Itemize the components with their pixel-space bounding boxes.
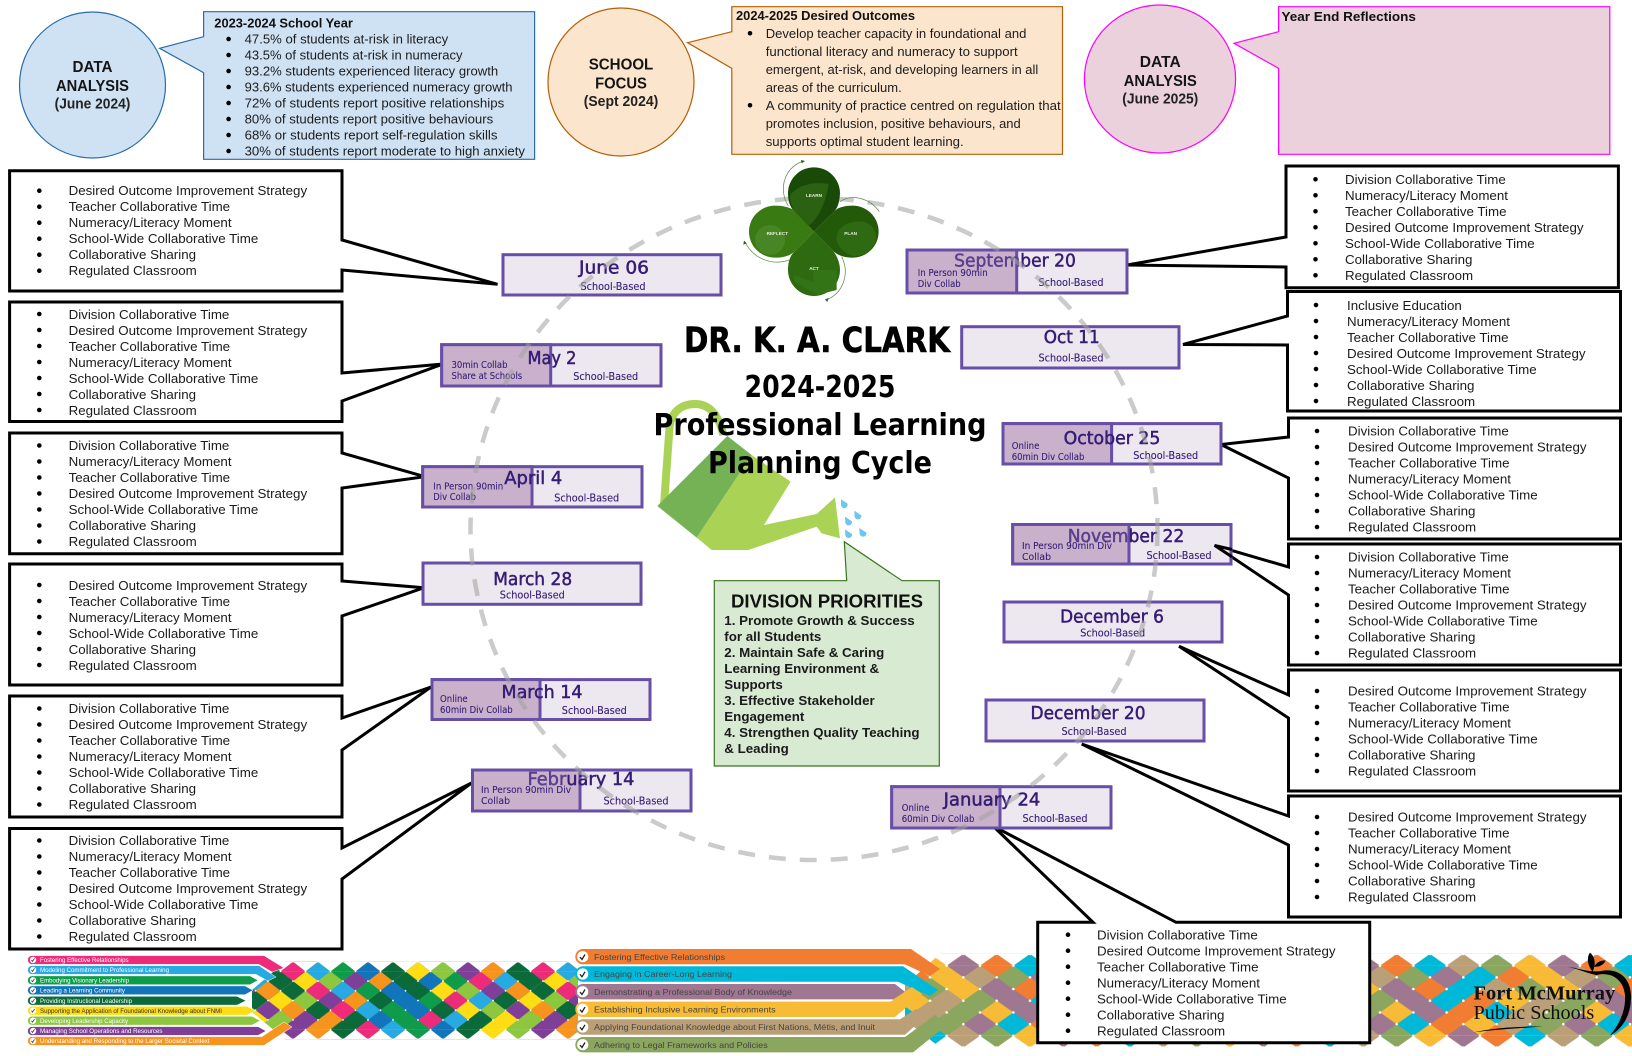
list box: December 6: Desired Outcome Improvement Strategy [1348,684,1587,699]
title: 2024-2025 [744,370,896,405]
list box: December 6: Numeracy/Literacy Moment [1348,716,1511,731]
date box: Oct 11 [962,327,1179,368]
logo: Fort McMurray Public Schools: Fort McMurray [1474,982,1615,1004]
list box: January 24 [993,826,1370,1043]
list box: March 14: Numeracy/Literacy Moment [69,749,232,764]
panel: data analysis June 2025 circle: DATA [1140,54,1181,71]
left leadership weave ribbon: Providing Instructional Leadership [40,998,133,1005]
date box: February 14: Collab [481,796,510,807]
date box: November 22 [1013,524,1231,564]
panel: 2023-2024 school year data callout [160,12,535,159]
left leadership weave ribbon: Understanding and Responding to the Larger Societal Context [40,1038,210,1045]
list box: October 25: Regulated Classroom [1348,520,1476,534]
left leadership weave ribbon: Managing School Operations and Resources [40,1028,162,1035]
list box: Oct 11: Collaborative Sharing [1347,378,1474,393]
list box: March 14: Regulated Classroom [69,797,197,812]
date box: March 28 [423,563,641,604]
list box: April 4: Division Collaborative Time [69,438,229,453]
list box: November 22: Regulated Classroom [1348,646,1476,660]
right teaching weave ribbon: Adhering to Legal Frameworks and Policies [594,1040,768,1050]
callout: division priorities: & Leading [724,741,789,756]
list box: February 14: Collaborative Sharing [69,913,196,928]
list box: November 22: Numeracy/Literacy Moment [1348,566,1511,580]
list box: May 2: Collaborative Sharing [69,387,196,402]
logo: Fort McMurray Public Schools [1473,953,1631,1036]
list box: January 24: Numeracy/Literacy Moment [1097,976,1260,990]
date box: October 25: 60min Div Collab [1012,452,1084,463]
list box: Oct 11: Numeracy/Literacy Moment [1347,314,1510,329]
panel: school focus circle: SCHOOL [589,56,654,74]
list box: April 4: Regulated Classroom [69,534,197,549]
list box: November 22 [1215,544,1620,665]
date box: November 22: In Person 90min Div [1022,541,1112,552]
date box: June 06: June 06 [578,258,649,278]
list box: April 4: Collaborative Sharing [69,518,196,533]
list box: December 6: Teacher Collaborative Time [1348,700,1510,715]
callout: division priorities: Learning Environment & [724,661,879,676]
callout: division priorities: Supports [724,677,783,692]
list box: March 14 [10,687,431,817]
list box: February 14: Numeracy/Literacy Moment [69,849,232,864]
list box: March 14: Division Collaborative Time [69,701,229,716]
list box: June 06: Numeracy/Literacy Moment [69,215,232,230]
arrow: November 22 callout tip over date box [1215,545,1232,557]
list box: December 20 [1082,744,1620,917]
date box: March 28: School-Based [500,589,565,601]
list box: June 06: School-Wide Collaborative Time [69,231,258,246]
date box: October 25: School-Based [1133,450,1198,462]
list box: Oct 11: School-Wide Collaborative Time [1347,362,1537,377]
list box: June 06: Collaborative Sharing [69,247,196,262]
icon: learn plan act reflect clover: PLAN [844,231,858,236]
date box: March 14: March 14 [502,683,582,703]
list box: May 2: Division Collaborative Time [69,307,229,322]
list box: January 24: Collaborative Sharing [1097,1008,1224,1022]
list box: September 20: Desired Outcome Improvement Strategy [1345,220,1584,235]
panel: 2024-2025 desired outcomes callout: functional literacy and numeracy to support [766,44,1018,59]
list box: September 20: Collaborative Sharing [1345,252,1472,267]
list box: March 28: Desired Outcome Improvement Strategy [69,578,307,593]
list box: March 14: School-Wide Collaborative Time [69,765,258,780]
list box: October 25: School-Wide Collaborative Time [1348,488,1538,502]
right teaching weave ribbon: Demonstrating a Professional Body of Knowledge [594,987,792,997]
list box: November 22: Division Collaborative Time [1348,550,1509,564]
title: Professional Learning [654,408,986,443]
right teaching weave ribbon [575,949,1632,1052]
list box: October 25: Collaborative Sharing [1348,504,1475,518]
panel: 2023-2024 school year data callout: 47.5% of students at-risk in literacy [245,32,449,46]
date box: December 20: December 20 [1030,704,1146,724]
date box: April 4: School-Based [554,493,619,505]
list box: February 14 [10,783,471,949]
panel: 2023-2024 school year data callout: 93.6% students experienced numeracy growth [245,80,512,94]
left leadership weave ribbon: Embodying Visionary Leadership [40,978,130,984]
panel: data analysis June 2025 circle [1084,5,1236,153]
date box: November 22: Collab [1022,552,1051,563]
title: Planning Cycle [708,446,932,481]
panel: data analysis June 2024 circle: DATA [72,59,113,76]
panel: year end reflections callout [1234,7,1610,154]
list box: May 2: Desired Outcome Improvement Strategy [69,323,307,338]
list box: Oct 11 [1183,292,1620,411]
panel: 2023-2024 school year data callout: 72% of students report positive relationships [245,96,505,110]
list box: Oct 11: Desired Outcome Improvement Strategy [1347,346,1586,361]
right teaching weave ribbon: Engaging in Career-Long Learning [594,969,732,979]
callout: division priorities: 3. Effective Stakeholder [724,693,875,708]
list box: June 06 [10,171,497,291]
date box: May 2: May 2 [528,349,576,369]
list box: December 20: Teacher Collaborative Time [1348,826,1510,840]
list box: June 06: Regulated Classroom [69,263,197,278]
list box: December 6: Collaborative Sharing [1348,748,1475,763]
panel: 2023-2024 school year data callout: 93.2% students experienced literacy growth [245,64,498,78]
right teaching weave ribbon: Applying Foundational Knowledge about First Nations, Métis, and Inuit [594,1022,876,1032]
date box: January 24: Online [902,803,930,814]
date box: April 4: April 4 [504,469,562,489]
date box: January 24 [892,787,1111,828]
date box: September 20: In Person 90min [918,268,988,279]
panel: 2023-2024 school year data callout: 80% of students report positive behaviours [245,112,494,126]
panel: school focus circle: FOCUS [595,76,647,92]
panel: 2024-2025 desired outcomes callout: Develop teacher capacity in foundational and [766,26,1026,41]
list box: November 22: School-Wide Collaborative Time [1348,614,1538,628]
left leadership weave ribbon: Supporting the Application of Foundational Knowledge about FNMI [40,1008,222,1015]
panel: 2024-2025 desired outcomes callout: areas of the curriculum. [766,80,902,95]
icon: learn plan act reflect clover: LEARN [806,193,823,198]
list box: December 20: School-Wide Collaborative Time [1348,858,1538,872]
list box: April 4: Teacher Collaborative Time [69,470,230,485]
list box: September 20: Regulated Classroom [1345,268,1473,283]
list box: October 25: Numeracy/Literacy Moment [1348,472,1511,486]
list box: February 14: Division Collaborative Time [69,833,229,848]
list box: September 20 [1127,166,1618,288]
list box: February 14: Desired Outcome Improvement Strategy [69,881,307,896]
panel: 2024-2025 desired outcomes callout: emergent, at-risk, and developing learners in all [766,62,1038,77]
list box: January 24: Teacher Collaborative Time [1097,960,1258,974]
date box: May 2: Share at Schools [452,371,522,382]
callout: division priorities: 4. Strengthen Quality Teaching [724,725,920,740]
list box: March 14: Desired Outcome Improvement Strategy [69,717,307,732]
date box: February 14 [472,770,691,811]
left leadership weave ribbon [28,955,580,1045]
list box: February 14: Regulated Classroom [69,929,197,944]
title: DR. K. A. CLARK [684,321,952,361]
icon: learn plan act reflect clover: REFLECT [767,231,788,236]
list box: December 20: Regulated Classroom [1348,890,1476,904]
date box: March 28: March 28 [493,570,572,590]
list box: May 2: Numeracy/Literacy Moment [69,355,232,370]
panel: data analysis June 2025 circle: ANALYSIS [1124,73,1197,90]
date box: January 24: January 24 [943,791,1040,811]
list box: January 24: Desired Outcome Improvement Strategy [1097,944,1336,958]
panel: 2023-2024 school year data callout: 2023-2024 School Year [214,16,353,30]
list box: April 4 [10,433,425,554]
date box: April 4: Div Collab [433,492,476,503]
date box: Oct 11: School-Based [1038,353,1104,365]
list box: May 2 [10,302,443,422]
list box: September 20: Division Collaborative Time [1345,172,1506,187]
left leadership weave ribbon: Developing Leadership Capacity [40,1018,129,1025]
panel: school focus circle [548,8,694,156]
list box: March 28: Numeracy/Literacy Moment [69,610,232,625]
list box: May 2: Teacher Collaborative Time [69,339,230,354]
list box: December 6: Regulated Classroom [1348,764,1476,779]
date box: March 14: Online [440,694,468,705]
date box: March 14 [432,680,650,720]
panel: data analysis June 2024 circle: (June 2024) [55,96,131,112]
callout: division priorities: 1. Promote Growth & Success [724,613,915,628]
callout: division priorities: 2. Maintain Safe & Caring [724,645,884,660]
icon: learn plan act reflect clover [743,160,879,302]
panel: 2023-2024 school year data callout: 43.5% of students at-risk in numeracy [245,48,463,62]
left leadership weave ribbon: Modeling Commitment to Professional Learning [40,967,170,974]
right teaching weave ribbon: Establishing Inclusive Learning Environments [594,1004,776,1014]
panel: 2024-2025 desired outcomes callout: 2024-2025 Desired Outcomes [736,8,915,23]
list box: March 28 [10,564,424,685]
panel: 2023-2024 school year data callout: 68% or students report self-regulation skills [245,128,498,142]
date box: December 20 [986,700,1204,741]
list box: December 20: Desired Outcome Improvement Strategy [1348,810,1587,824]
callout: division priorities: for all Students [724,629,821,644]
list box: May 2: Regulated Classroom [69,403,197,418]
list box: November 22: Teacher Collaborative Time [1348,582,1510,596]
list box: October 25 [1221,418,1620,539]
date box: May 2: 30min Collab [452,360,508,371]
list box: December 20: Numeracy/Literacy Moment [1348,842,1511,856]
list box: Oct 11: Teacher Collaborative Time [1347,330,1508,345]
panel: school focus circle: (Sept 2024) [584,94,658,110]
panel: 2024-2025 desired outcomes callout [688,7,1062,154]
list box: September 20: Numeracy/Literacy Moment [1345,188,1508,203]
list box: June 06: Teacher Collaborative Time [69,199,230,214]
date box: May 2: School-Based [573,371,638,383]
date box: Oct 11: Oct 11 [1044,328,1100,348]
date box: February 14: In Person 90min Div [481,785,571,796]
list box: March 28: School-Wide Collaborative Time [69,626,258,641]
date box: October 25: October 25 [1064,429,1160,449]
panel: 2024-2025 desired outcomes callout: supports optimal student learning. [766,134,964,149]
date box: June 06 [503,255,721,295]
list box: October 25: Division Collaborative Time [1348,424,1509,438]
panel: data analysis June 2024 circle: ANALYSIS [56,78,129,95]
date box: November 22: November 22 [1068,527,1184,547]
date box: September 20: September 20 [954,252,1076,272]
date box: February 14: School-Based [604,796,668,808]
list box: September 20: School-Wide Collaborative Time [1345,236,1535,251]
panel: 2024-2025 desired outcomes callout: A community of practice centred on regulation that [766,98,1061,113]
date box: May 2 [442,345,661,386]
date box: September 20: Div Collab [918,279,961,290]
list box: December 6 [1179,646,1620,791]
icon: learn plan act reflect clover: ACT [809,266,819,271]
list box: February 14: Teacher Collaborative Time [69,865,230,880]
date box: December 6: December 6 [1060,608,1164,628]
date box: March 14: 60min Div Collab [440,705,513,716]
right teaching weave ribbon: Fostering Effective Relationships [594,952,726,962]
list box: May 2: School-Wide Collaborative Time [69,371,258,386]
date box: October 25 [1003,424,1221,464]
panel: year end reflections callout: Year End Reflections [1282,9,1416,24]
date box: January 24: School-Based [1022,813,1088,825]
list box: April 4: School-Wide Collaborative Time [69,502,258,517]
list box: April 4: Desired Outcome Improvement Strategy [69,486,307,501]
icon: watering can [657,404,866,550]
dashed cycle circle [470,198,1158,860]
list box: January 24: School-Wide Collaborative Time [1097,992,1287,1006]
list box: March 28: Regulated Classroom [69,658,197,673]
date box: October 25: Online [1012,441,1040,452]
panel: data analysis June 2024 circle [20,12,166,158]
callout: division priorities: DIVISION PRIORITIES [731,591,923,612]
list box: October 25: Teacher Collaborative Time [1348,456,1510,470]
title [654,321,986,481]
list box: March 14: Teacher Collaborative Time [69,733,230,748]
list box: Oct 11: Regulated Classroom [1347,394,1475,409]
list box: February 14: School-Wide Collaborative Time [69,897,258,912]
list box: December 20: Collaborative Sharing [1348,874,1475,888]
list box: Oct 11: Inclusive Education [1347,298,1462,313]
logo: Fort McMurray Public Schools: Public Schools [1474,1002,1594,1024]
list box: January 24: Regulated Classroom [1097,1024,1225,1038]
date box: December 20: School-Based [1062,726,1126,738]
left leadership weave ribbon: Leading a Learning Community [40,988,126,994]
list box: October 25: Desired Outcome Improvement Strategy [1348,440,1587,454]
date box: September 20 [907,250,1127,293]
date box: June 06: School-Based [580,281,646,293]
list box: March 28: Teacher Collaborative Time [69,594,230,609]
date box: April 4 [423,467,642,507]
panel: 2023-2024 school year data callout: 30% of students report moderate to high anxiety [245,144,525,158]
list box: March 28: Collaborative Sharing [69,642,196,657]
date box: April 4: In Person 90min [433,482,503,492]
callout: division priorities [714,542,939,766]
date box: September 20: School-Based [1038,277,1104,289]
list box: September 20: Teacher Collaborative Time [1345,204,1506,219]
date box: November 22: School-Based [1146,550,1212,562]
list box: January 24: Division Collaborative Time [1097,928,1258,942]
list box: November 22: Collaborative Sharing [1348,630,1475,644]
list box: March 14: Collaborative Sharing [69,781,196,796]
date box: December 6: School-Based [1080,628,1145,640]
panel: 2024-2025 desired outcomes callout: promotes inclusion, positive behaviours, and [766,116,1021,131]
date box: March 14: School-Based [562,705,627,717]
date box: February 14: February 14 [528,770,634,790]
list box: November 22: Desired Outcome Improvement Strategy [1348,598,1587,612]
list box: June 06: Desired Outcome Improvement Strategy [69,183,307,198]
date box: January 24: 60min Div Collab [902,814,974,825]
callout: division priorities: Engagement [724,709,805,724]
left leadership weave ribbon: Fostering Effective Relationships [40,957,129,964]
panel: data analysis June 2025 circle: (June 2025) [1122,92,1198,108]
date box: December 6 [1004,602,1222,642]
list box: April 4: Numeracy/Literacy Moment [69,454,232,469]
list box: December 6: School-Wide Collaborative Time [1348,732,1538,747]
